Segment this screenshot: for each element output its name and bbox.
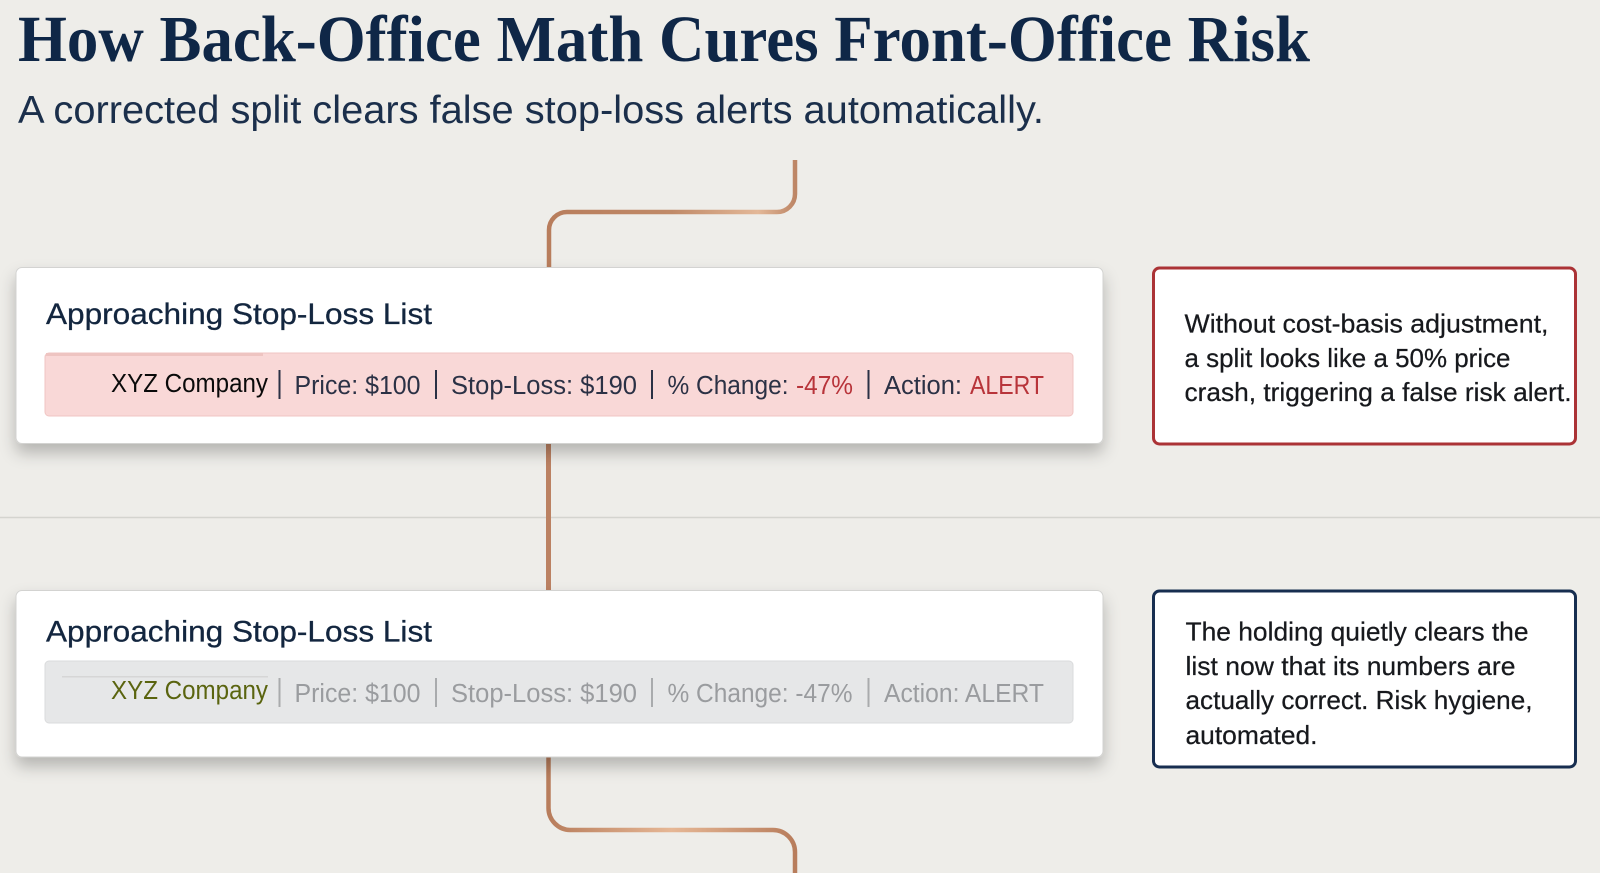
cleared row: XYZ Company: [111, 677, 268, 705]
cleared row: Stop-Loss: $190: [451, 680, 637, 708]
title: How Back-Office Math Cures Front-Office Risk: [18, 3, 1310, 76]
alert row: [45, 353, 1073, 416]
cleared row: Price: $100: [294, 680, 420, 708]
callout: false risk alert: crash, triggering a false risk alert.: [1184, 377, 1572, 407]
alert row: Stop-Loss: $190: [451, 372, 637, 400]
cleared row: % Change: -47%: [668, 680, 852, 708]
alert row: Price: $100: [294, 372, 420, 400]
callout: false risk alert: a split looks like a 50% price: [1184, 343, 1510, 373]
arrow: middle copper connector: [546, 443, 551, 591]
arrow: top copper connector: [549, 160, 795, 268]
callout: holding clears the list: The holding quietly clears the: [1186, 616, 1528, 646]
panel heading: Approaching Stop-Loss List: [46, 616, 432, 648]
alert row: % Change:: [668, 372, 788, 400]
subtitle: A corrected split clears false stop-loss alerts automatically.: [18, 89, 1044, 132]
panel: stop-loss list before correction: [16, 268, 1103, 444]
arrow: bottom copper connector: [548, 757, 795, 873]
cleared row: Action: ALERT: [884, 680, 1044, 708]
cleared row: [45, 661, 1073, 723]
callout: false risk alert: [1154, 268, 1576, 444]
callout: holding clears the list: [1154, 591, 1576, 767]
alert row: Action:: [884, 372, 962, 400]
callout: holding clears the list: list now that its numbers are: [1186, 651, 1516, 681]
panel: stop-loss list after correction: [16, 590, 1103, 757]
callout: holding clears the list: automated.: [1186, 720, 1318, 750]
alert row: ALERT: [970, 372, 1044, 400]
panel heading: Approaching Stop-Loss List: [46, 298, 432, 331]
alert row: -47%: [796, 372, 853, 400]
callout: holding clears the list: actually correct. Risk hygiene,: [1186, 685, 1532, 715]
alert row: XYZ Company: [111, 370, 268, 398]
callout: false risk alert: Without cost-basis adjustment,: [1184, 308, 1548, 338]
